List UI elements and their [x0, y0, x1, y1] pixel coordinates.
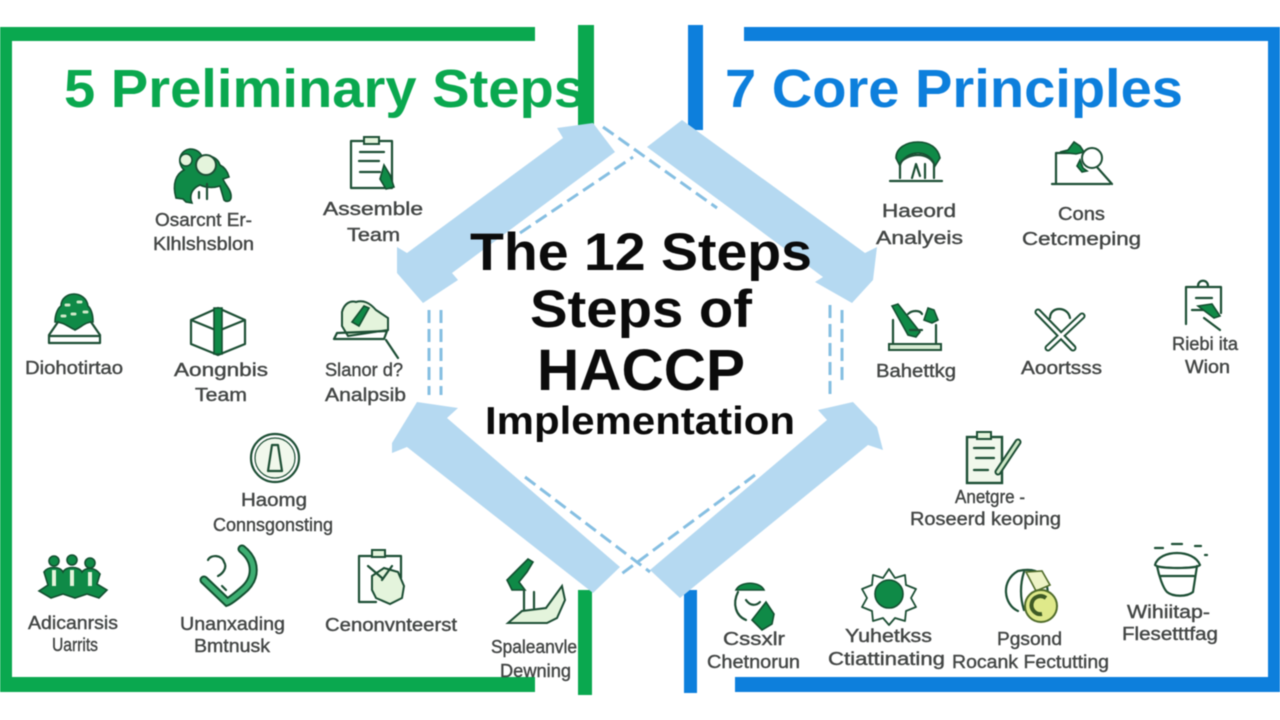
step: plant tray [25, 294, 123, 378]
step: pot [1122, 544, 1218, 644]
label: Cons [1058, 204, 1105, 224]
label [174, 360, 268, 405]
icon: notebook and pen [889, 304, 941, 350]
label [828, 626, 945, 669]
label: Riebi ita [1172, 334, 1239, 354]
blue frame [684, 25, 1280, 693]
label: Roseerd keoping [910, 509, 1061, 529]
step: clipboard map [325, 550, 457, 635]
label [952, 629, 1109, 672]
title: the 12 steps of HACCP implementation: HACCP [537, 338, 745, 403]
icon: pot [1155, 544, 1207, 596]
label [180, 614, 285, 656]
icon: magnifier [334, 301, 398, 358]
icon: curved band [204, 549, 253, 602]
icon: box [191, 308, 245, 355]
label [323, 199, 423, 245]
icon: plant tray [49, 294, 100, 343]
dashed hexagon lines [429, 127, 842, 575]
step: gear sun [828, 569, 945, 669]
label: Bahettkg [876, 361, 956, 381]
label: Osarcnt Er- [155, 210, 252, 230]
label: Connsgonsting [213, 515, 333, 535]
central hexagon cycle [392, 120, 883, 598]
label: Flesetttfag [1122, 624, 1218, 644]
label: Pgsond [997, 629, 1062, 649]
label: Adicanrsis [28, 613, 118, 633]
icon: cap and leaf [735, 583, 774, 630]
label: Analyeis [876, 228, 963, 248]
step: leaf shield [707, 583, 800, 672]
label: Haeord [882, 201, 956, 221]
label [1022, 204, 1141, 249]
step: magnifier analysis [325, 301, 406, 405]
label: Wihiitap- [1127, 602, 1210, 622]
label: Team [347, 225, 400, 245]
step: notebook and pen [876, 304, 956, 381]
step: clipboard with tool [1172, 281, 1239, 377]
label: Aongnbis [174, 360, 268, 380]
label [910, 487, 1061, 529]
label: Unanxading [180, 614, 285, 634]
label: Rocank Fectutting [952, 652, 1109, 672]
step: shield and coin [952, 570, 1109, 672]
icon: people [174, 149, 231, 203]
label [153, 210, 254, 254]
label: Assemble [323, 199, 423, 219]
arrow: top right [647, 120, 877, 303]
step: hazard analysis [876, 142, 963, 248]
panel: 5 preliminary steps [0, 25, 594, 695]
label: Uarrits [52, 635, 98, 655]
arrow: bottom right [650, 402, 883, 598]
label: Ctiattinating [828, 649, 945, 669]
label: Anetgre - [955, 487, 1025, 507]
icon: badge [251, 434, 299, 482]
label: Diohotirtao [25, 358, 123, 378]
label [28, 613, 118, 655]
step: record keeping [910, 432, 1061, 529]
label [707, 629, 800, 672]
step: laptop and magnifier [1022, 142, 1141, 249]
label [876, 201, 963, 248]
icon: clipboard with leaf [359, 550, 404, 604]
title: the 12 steps of HACCP implementation: Implementation [485, 400, 795, 443]
arrow: bottom left [392, 402, 620, 593]
label [491, 637, 577, 681]
icon: crossed tools [1038, 309, 1082, 348]
label: Bmtnusk [194, 636, 271, 656]
label: Dewning [500, 661, 571, 681]
step: microscope [491, 559, 577, 681]
icon: clipboard [1186, 281, 1221, 330]
step: curved arrow [180, 549, 285, 656]
heading: 5 preliminary steps: 5 Preliminary Steps [64, 59, 585, 119]
title: the 12 steps of HACCP implementation: Steps of [530, 280, 752, 339]
icon: laptop with magnifier [1052, 142, 1112, 184]
icon: arch gear [890, 142, 942, 181]
label: Aoortsss [1021, 358, 1102, 378]
step: box [174, 308, 268, 405]
label: Haomg [241, 490, 307, 510]
label: Cetcmeping [1022, 229, 1141, 249]
label [325, 360, 406, 405]
icon: group [39, 555, 107, 598]
title: the 12 steps of HACCP implementation [470, 223, 812, 443]
step: badge [213, 434, 333, 535]
title: the 12 steps of HACCP implementation: The 12 Steps [470, 223, 812, 282]
label: Yuhetkss [845, 626, 932, 646]
label: Cssxlr [723, 629, 785, 649]
label [1122, 602, 1218, 644]
label: Klhlshsblon [153, 234, 254, 254]
step: people [153, 149, 254, 254]
arrow: top left [397, 123, 615, 303]
step: crossed tools [1021, 309, 1102, 378]
label: Slanor d? [325, 360, 403, 380]
icon: shield and coin [1006, 570, 1057, 622]
step: group of people [28, 555, 118, 655]
icon: clipboard [351, 137, 394, 189]
label [213, 490, 333, 535]
step: assemble team [323, 137, 423, 245]
icon: microscope [507, 559, 565, 623]
icon: sun gear [862, 569, 916, 625]
green frame [0, 25, 594, 695]
label: Chetnorun [707, 652, 800, 672]
label: Spaleanvle [491, 637, 577, 657]
label: Team [195, 385, 247, 405]
heading: 7 core principles: 7 Core Principles [725, 59, 1183, 119]
label [1172, 334, 1239, 377]
label: Analpsib [325, 385, 406, 405]
panel: 7 core principles [684, 25, 1280, 693]
icon: clipboard and pencil [967, 432, 1018, 483]
label: Cenonvnteerst [325, 615, 457, 635]
label: Wion [1185, 357, 1230, 377]
